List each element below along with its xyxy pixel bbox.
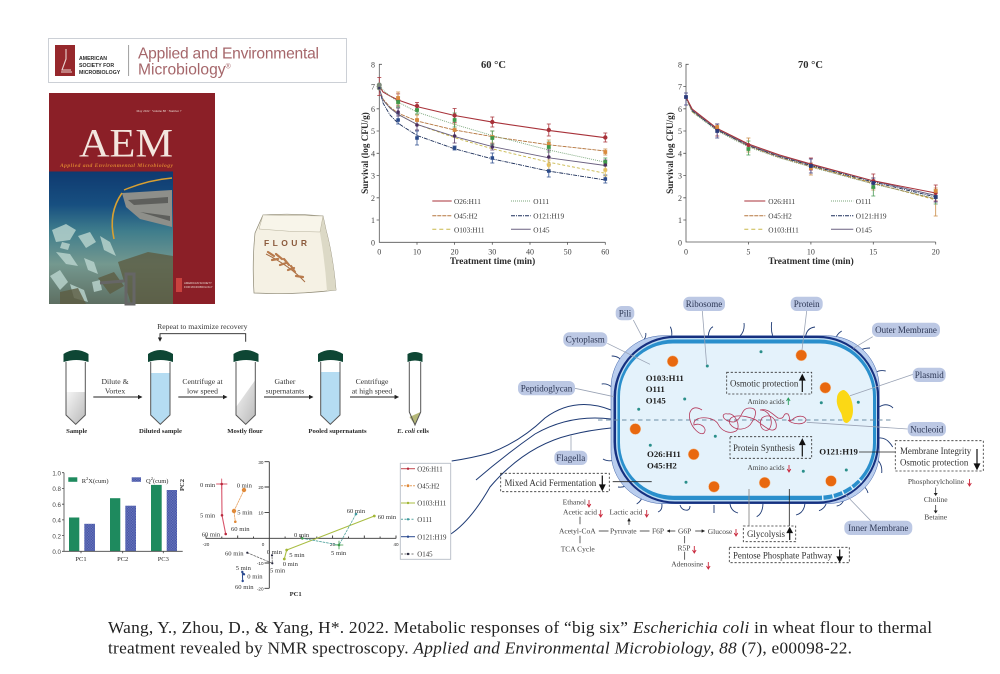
tube: E. coli cells: E. coli cells: [396, 428, 429, 435]
pili: [602, 322, 893, 517]
bar chart: R2X and Q2: 0.4: [52, 518, 62, 524]
cell label: peptidoglycan: Peptidoglycan: [521, 383, 573, 393]
box: mixed acid fermentation: Mixed Acid Fermentation: [504, 478, 597, 488]
box: membrane integrity: [895, 441, 983, 471]
axes 60 C: 1: [371, 216, 375, 225]
box: membrane integrity: Membrane Integrity: [900, 446, 972, 456]
PCA time labels: 60 min: [202, 532, 221, 538]
plasmid: [837, 390, 853, 423]
bar chart: R2X and Q2: PC2: [117, 556, 128, 563]
legend 70 C: O103:H11: [768, 225, 799, 234]
bar chart: R2X and Q2: 0.2: [52, 534, 62, 540]
amino acids down: Amino acids: [747, 463, 785, 472]
axes 60 C: 40: [526, 248, 534, 256]
box: pentose phosphate pathway: Pentose Phosphate Pathway: [733, 550, 833, 560]
strain group labels: O45:H2: [647, 460, 677, 470]
scatter legend box: O103:H11: [417, 501, 447, 508]
PCA axes: 10: [258, 510, 264, 516]
workflow step labels: [101, 322, 392, 396]
strain group labels: O111: [646, 384, 665, 394]
tube: pooled supernatants: Pooled supernatants: [308, 428, 367, 435]
axes 70 C: 6: [678, 105, 682, 114]
ribosomes: [637, 350, 860, 484]
flagella: [449, 405, 611, 535]
legend 60 C: O111: [533, 197, 549, 206]
bar chart legend: (cum): [153, 478, 168, 485]
PCA time labels: 5 min: [289, 552, 305, 559]
scatter plot: PCA score plot: [179, 460, 399, 598]
central metabolism pathway: Acetic acid: [563, 508, 597, 516]
PCA axes: PC1: [290, 591, 302, 598]
cell label: nucleoid: Nucleoid: [910, 424, 944, 434]
PCA time labels: 0 min: [247, 574, 263, 580]
PCA time labels: 0 min: [200, 482, 216, 489]
workflow step labels: Dilute &: [101, 377, 129, 386]
icon: flour bag: [253, 214, 336, 294]
cell label: protein: Protein: [794, 299, 820, 309]
journal cover: AMERICAN SOCIETY: [184, 281, 212, 285]
PCA time labels: 60 min: [347, 508, 366, 515]
central metabolism pathway: Ethanol: [563, 498, 586, 506]
central metabolism pathway: R5P: [678, 544, 690, 552]
legend 70 C: O45:H2: [768, 212, 792, 220]
bar chart: R2X and Q2: PC3: [158, 556, 169, 563]
PCA time labels: 5 min: [200, 512, 216, 520]
axes 60 C: 2: [371, 194, 375, 203]
journal logo banner: Microbiology: [138, 62, 226, 78]
bar chart legend: X(cum): [88, 478, 109, 485]
cell label: cytoplasm: Cytoplasm: [566, 335, 605, 345]
strain group labels: O145: [646, 396, 666, 406]
PCA time labels: 60 min: [225, 550, 244, 558]
bar chart: R2X and Q2: 0.8: [52, 486, 62, 493]
PCA time labels: [200, 482, 397, 591]
PCA axes: -20: [203, 542, 210, 547]
axes 60 C: 30: [488, 248, 496, 256]
midline dashed divider: [598, 419, 894, 421]
phosphorylcholine pathway: Betaine: [924, 512, 948, 522]
bar chart legend: Q: [146, 478, 151, 485]
curves and data points 70 C: [684, 93, 938, 216]
central metabolism pathway: Adenosine: [671, 560, 704, 568]
journal cover: AEM: [79, 120, 173, 166]
citation: Wang, Y., Zhou, D., & Yang, H*. 2022. Metabolic responses of “big six” Escherichia coli in wheat flour to thermal: [108, 618, 932, 637]
box: protein synthesis: Protein Synthesis: [733, 443, 795, 453]
journal logo banner: ®: [226, 62, 232, 70]
pentose connector line: [748, 489, 750, 526]
cell label: ribosome: Ribosome: [686, 299, 722, 309]
bar chart: R2X and Q2: 0.0: [52, 549, 62, 556]
label pointer lines: [571, 311, 913, 522]
legend 70 C: O26:H11: [768, 197, 796, 206]
axes 60 C: 8: [371, 60, 375, 70]
central metabolism pathway: Pyruvate: [610, 526, 637, 535]
cell label: outer membrane: [872, 323, 940, 337]
nucleoid DNA: [690, 408, 806, 434]
legend 70 C: O121:H19: [856, 212, 887, 220]
central metabolism pathway: G6P: [678, 526, 691, 536]
axes 60 C: 7: [371, 82, 375, 92]
cell label: flagella: Flagella: [556, 453, 585, 463]
box: osmotic protection: Osmotic protection: [730, 378, 799, 388]
cell label: peptidoglycan: [518, 381, 575, 395]
icon: flour bag: FLOUR: [264, 238, 307, 248]
chart title 70 C: 70 °C: [798, 60, 823, 71]
tube: sample: Sample: [66, 428, 87, 435]
axes 70 C: Survival (log CFU/g): [665, 112, 675, 194]
axes 70 C: 5: [746, 248, 750, 256]
box: glycolysis: Glycolysis: [747, 529, 786, 539]
legend 60 C: O26:H11: [454, 197, 481, 206]
journal logo banner: AMERICAN: [79, 56, 107, 62]
cell label: inner membrane: [844, 521, 912, 535]
tube: mostly flour: [227, 350, 263, 435]
bar chart legend: [68, 476, 168, 485]
PCA time labels: 60 min: [231, 526, 250, 533]
tube: pooled supernatants: [308, 350, 367, 435]
axes 70 C: 20: [932, 248, 940, 256]
workflow step labels: low speed: [187, 386, 218, 396]
axes 70 C: 7: [678, 82, 682, 92]
bar chart: R2X and Q2: PC1: [75, 556, 87, 563]
axes 60 C: [360, 60, 609, 267]
scatter legend box: O145: [417, 552, 433, 559]
box: protein synthesis: [730, 437, 812, 458]
cell label: protein: [791, 297, 823, 311]
axes 70 C: 3: [678, 172, 682, 180]
diagram: E. coli cell: [501, 297, 983, 569]
cell label: nucleoid: [908, 422, 946, 436]
legend 60 C: O103:H11: [454, 225, 485, 234]
axes 70 C: 1: [678, 216, 682, 225]
legend 60 C: [432, 197, 564, 234]
workflow step labels: Centrifuge at: [182, 377, 224, 386]
peptidoglycan layer: [614, 336, 879, 504]
central metabolism pathway: TCA Cycle: [561, 544, 595, 554]
PCA time labels: 60 min: [235, 584, 254, 591]
axes 60 C: 50: [564, 248, 572, 256]
cell label: plasmid: [913, 368, 946, 382]
strain group labels: O26:H11: [647, 449, 681, 459]
legend 70 C: O111: [856, 197, 872, 206]
scatter legend box: O26:H11: [417, 466, 443, 473]
cell label: ribosome: [683, 297, 725, 311]
phosphorylcholine pathway: [908, 477, 971, 522]
chart title 60 C: 60 °C: [481, 60, 506, 71]
cell label: pili: Pili: [619, 308, 632, 318]
bar chart: R2X and Q2: [52, 470, 183, 563]
workflow step labels: Repeat to maximize recovery: [157, 322, 248, 331]
journal cover: May 2022 · Volume 88 · Number 7: [136, 109, 182, 113]
scatter legend box: O45:H2: [417, 483, 440, 490]
scatter legend box: [400, 463, 451, 559]
PCA axes: 0: [262, 542, 265, 547]
axes 70 C: Treatment time (min): [768, 256, 854, 267]
inner membrane: [618, 340, 876, 500]
axes 70 C: 4: [678, 150, 682, 158]
tube: E. coli cells: [396, 352, 429, 435]
PCA time labels: 0 min: [294, 532, 310, 539]
strain group labels: O103:H11: [646, 373, 684, 383]
PCA axes: 30: [258, 460, 264, 465]
axes 60 C: 5: [371, 127, 375, 136]
outer membrane: [611, 336, 879, 504]
central metabolism pathway: F6P: [652, 526, 664, 536]
journal logo banner: MICROBIOLOGY: [79, 70, 121, 76]
workflow arrows: [93, 334, 398, 397]
PCA axes: -10: [257, 561, 264, 566]
PCA time labels: 5 min: [236, 565, 252, 572]
box: osmotic protection: [727, 372, 812, 394]
proteins: [630, 350, 836, 492]
strain connector lines: [613, 452, 895, 526]
diagram: cell recovery workflow: [64, 322, 429, 435]
central metabolism pathway: [559, 498, 738, 569]
tube: mostly flour: Mostly flour: [227, 428, 263, 435]
box: glycolysis: [743, 526, 796, 542]
PCA axes: 20: [330, 542, 336, 547]
bar chart: R2X and Q2: 0.6: [52, 502, 62, 509]
axes 60 C: 0: [371, 238, 375, 248]
box: membrane integrity: Osmotic protection: [900, 458, 969, 468]
axes 70 C: 0: [678, 238, 682, 248]
tube: diluted sample: [139, 350, 182, 435]
bar chart legend: 2: [151, 476, 153, 481]
PCA time labels: 0 min: [283, 561, 299, 568]
journal cover: [49, 93, 215, 304]
PCA time labels: 0 min: [237, 482, 253, 490]
strain group labels: O121:H19: [819, 446, 859, 456]
box: mixed acid fermentation: [501, 473, 609, 492]
scatter legend box: O111: [417, 517, 433, 524]
axes 60 C: 0: [377, 248, 381, 256]
legend 60 C: O45:H2: [454, 212, 478, 220]
curves and data points 60 C: [377, 78, 607, 183]
phosphorylcholine pathway: Phosphorylcholine: [908, 477, 965, 486]
bar chart legend: 2: [86, 476, 88, 481]
workflow step labels: Gather: [275, 377, 296, 386]
legend 60 C: O121:H19: [533, 212, 564, 220]
PCA axes: -20: [257, 586, 264, 592]
citation: treatment revealed by NMR spectroscopy. Applied and Environmental Microbiology, 88 (7), e00098-22.: [108, 638, 852, 658]
axes 60 C: 4: [371, 150, 375, 158]
PCA axes: 20: [258, 485, 264, 490]
central metabolism pathway: Acetyl-CoA: [559, 526, 596, 535]
journal logo banner: SOCIETY FOR: [79, 63, 114, 69]
strain group labels: [646, 373, 859, 470]
workflow step labels: at high speed: [352, 386, 392, 396]
PCA trajectories: [216, 479, 374, 581]
axes 70 C: 2: [678, 194, 682, 203]
axes 60 C: 3: [371, 172, 375, 180]
tube: diluted sample: Diluted sample: [139, 428, 182, 435]
axes 60 C: 20: [451, 248, 459, 256]
journal cover: FOR MICROBIOLOGY: [184, 285, 213, 289]
box: pentose phosphate pathway: [729, 547, 849, 563]
cell label: cytoplasm: [563, 332, 607, 347]
axes 70 C: [665, 60, 940, 267]
legend 70 C: O145: [856, 225, 872, 234]
PCA time labels: 0 min: [267, 549, 283, 556]
bar chart: R2X and Q2: 1.0: [52, 470, 62, 478]
journal logo banner: Applied and Environmental: [138, 46, 319, 62]
phosphorylcholine pathway: Choline: [924, 495, 948, 504]
chart: survival at 60 C: [360, 60, 609, 267]
cell label: inner membrane: Inner Membrane: [848, 523, 908, 533]
axes 70 C: 8: [678, 60, 682, 70]
citation: [108, 618, 932, 658]
axes 70 C: 10: [807, 248, 815, 256]
axes 60 C: 10: [413, 248, 421, 256]
axes 70 C: 5: [678, 127, 682, 136]
PCA time labels: 5 min: [270, 568, 286, 574]
axes 70 C: 0: [684, 248, 688, 256]
cell label: pili: [616, 306, 634, 320]
axes 60 C: Survival (log CFU/g): [360, 112, 370, 194]
inner membrane gaps: [822, 473, 866, 498]
PCA time labels: 5 min: [237, 510, 253, 516]
legend 70 C: [744, 197, 887, 234]
periplasm: [616, 338, 877, 502]
PCA axes: PC2: [179, 478, 186, 491]
tube: sample: [64, 350, 88, 435]
scatter legend box: O121:H19: [417, 534, 447, 541]
cytoplasm: [620, 344, 873, 496]
workflow step labels: supernatants: [266, 386, 304, 396]
cell label: outer membrane: Outer Membrane: [875, 325, 937, 335]
PCA time labels: 5 min: [331, 550, 347, 557]
bar chart legend: R: [82, 478, 86, 485]
central metabolism pathway: Lactic acid: [609, 508, 643, 516]
PCA axes: 40: [393, 542, 399, 547]
PCA time labels: 60 min: [378, 514, 397, 521]
journal logo banner: [48, 38, 346, 82]
central metabolism pathway: Glucose: [708, 527, 733, 536]
axes 60 C: Treatment time (min): [450, 256, 535, 267]
amino acids up: Amino acids: [747, 397, 785, 406]
workflow step labels: Vortex: [105, 386, 125, 396]
journal cover: Applied and Environmental Microbiology: [59, 163, 174, 169]
PCA axes: [179, 460, 399, 598]
cell label: flagella: [554, 451, 587, 465]
chart: survival at 70 C: [665, 60, 940, 267]
axes 60 C: 6: [371, 105, 375, 114]
axes 70 C: 15: [869, 248, 877, 256]
workflow step labels: Centrifuge: [356, 377, 389, 386]
axes 60 C: 60: [601, 248, 609, 256]
cell label: plasmid: Plasmid: [915, 370, 944, 380]
legend 60 C: O145: [533, 225, 550, 234]
